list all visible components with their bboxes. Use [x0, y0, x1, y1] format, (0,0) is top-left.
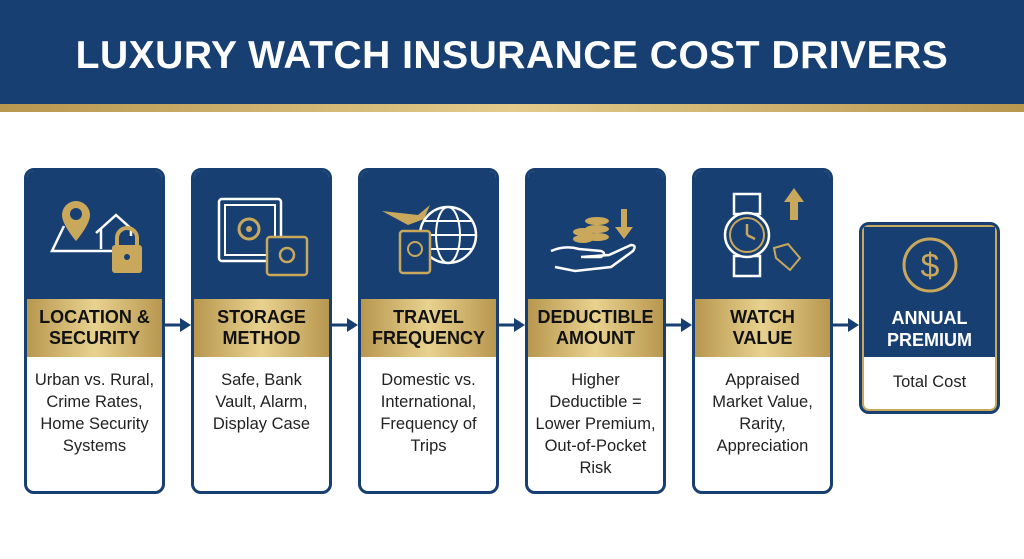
icon: plane globe passport — [382, 205, 478, 274]
panel: travel: Frequency of — [380, 415, 477, 433]
panel: deductible: AMOUNT — [556, 328, 635, 348]
panel: location: LOCATION & — [39, 307, 150, 327]
panel: travel: Trips — [410, 437, 447, 455]
panel: watch value: Appraised — [725, 371, 800, 389]
panel: storage: Display Case — [213, 415, 310, 433]
panel: watch value: Market Value, — [712, 393, 813, 411]
heading: annual premium: ANNUAL — [892, 308, 968, 328]
panel: location: Urban vs. Rural, — [35, 371, 154, 389]
panel: storage — [191, 168, 332, 494]
panel: location: SECURITY — [49, 328, 140, 348]
panel: annual premium — [859, 222, 1000, 414]
panel: watch value: Rarity, — [739, 415, 786, 433]
panel: storage: Safe, Bank — [221, 371, 302, 389]
panel: watch value — [692, 168, 833, 494]
panel: deductible — [525, 168, 666, 494]
panel: travel — [358, 168, 499, 494]
icon: hand coins — [550, 209, 636, 272]
arrow — [499, 318, 525, 332]
panel: deductible: Out-of-Pocket — [545, 437, 646, 455]
panel: storage: Vault, Alarm, — [215, 393, 308, 411]
header — [0, 0, 1024, 104]
icon: safe — [218, 198, 308, 276]
title: LUXURY WATCH INSURANCE COST DRIVERS — [76, 34, 948, 77]
heading: annual premium: PREMIUM — [887, 330, 972, 350]
arrow — [332, 318, 358, 332]
arrow — [666, 318, 692, 332]
icon: location lock — [50, 201, 142, 273]
panel: location: Crime Rates, — [46, 393, 143, 411]
panel: storage: STORAGE — [217, 307, 306, 327]
panel: location — [24, 168, 165, 494]
text: total cost: Total Cost — [893, 373, 966, 391]
panel: travel: TRAVEL — [393, 307, 464, 327]
panel: storage: METHOD — [222, 328, 300, 348]
arrow — [833, 318, 859, 332]
panel: watch value: VALUE — [733, 328, 792, 348]
panel: location: Home Security — [40, 415, 149, 433]
panel: deductible: Risk — [579, 459, 612, 477]
panel: travel: International, — [381, 393, 476, 411]
panel: deductible: Higher — [571, 371, 620, 389]
panel: deductible: Deductible = — [549, 393, 642, 411]
icon: dollar: $ — [921, 247, 940, 285]
panel: deductible: Lower Premium, — [535, 415, 656, 433]
panel: watch value: Appreciation — [717, 437, 808, 455]
panel: watch value: WATCH — [730, 307, 795, 327]
panel: travel: Domestic vs. — [381, 371, 476, 389]
panel: location: Systems — [63, 437, 126, 455]
heading: annual premium — [887, 308, 972, 350]
panel: travel: FREQUENCY — [372, 328, 485, 348]
arrow — [165, 318, 191, 332]
panel: deductible: DEDUCTIBLE — [538, 307, 654, 327]
icon: watch — [724, 188, 804, 278]
icon: dollar — [902, 238, 958, 292]
